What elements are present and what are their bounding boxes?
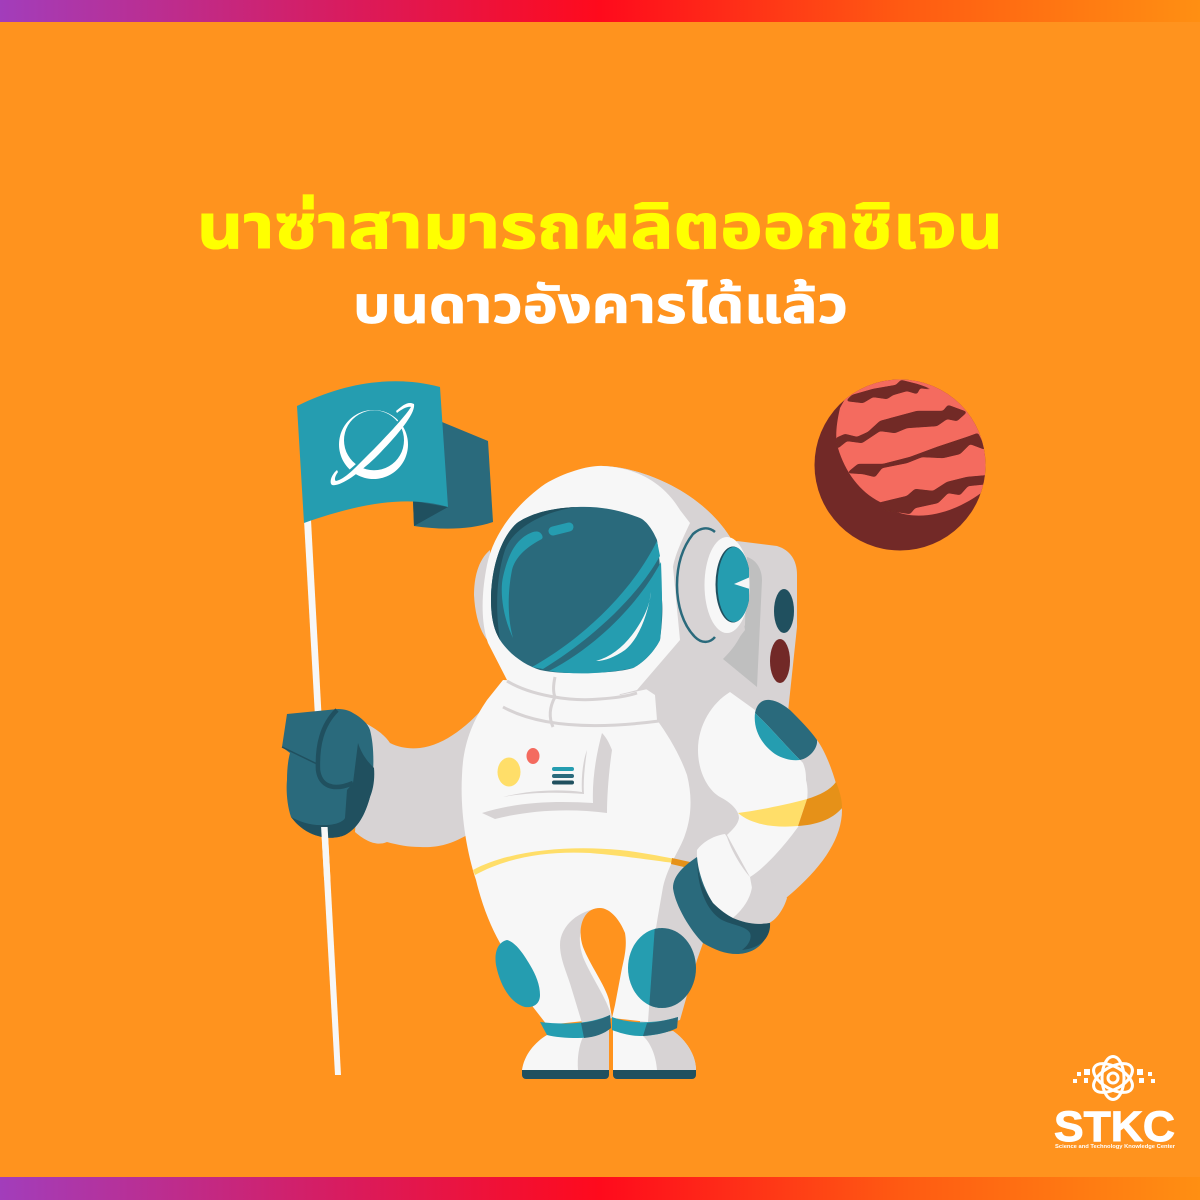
left glove flap line	[282, 747, 317, 764]
waist belt stripe	[473, 848, 675, 875]
backpack	[700, 541, 797, 712]
top gradient bar	[0, 0, 1200, 22]
arm band	[738, 782, 842, 827]
visor teal lower section	[549, 562, 662, 673]
torso and legs	[462, 680, 691, 1025]
ear white ring	[704, 537, 750, 633]
left boot sole	[522, 1070, 609, 1079]
flag planet emblem	[331, 403, 414, 485]
visor rim shadow	[491, 507, 577, 640]
astronaut	[282, 466, 842, 1079]
chest yellow light	[498, 758, 520, 786]
backpack shadow	[723, 557, 762, 687]
right upper arm	[698, 692, 808, 877]
body shadow	[603, 466, 842, 1030]
right glove shadow	[697, 857, 770, 950]
right boot	[613, 1030, 696, 1079]
title line 1: นาซ่าสามารถผลิตออกซิเจน	[197, 193, 1003, 262]
right boot shadow	[643, 1031, 696, 1070]
helmet shadow	[560, 466, 735, 695]
visor reflection	[596, 592, 651, 661]
chest panel	[482, 733, 612, 819]
backpack button dark	[774, 589, 794, 633]
right forearm	[697, 834, 752, 918]
forearm shadow	[733, 880, 787, 924]
right ankle cuff	[612, 1017, 678, 1036]
chest red light	[526, 748, 540, 764]
left boot	[522, 1030, 609, 1079]
left glove shadow	[291, 743, 374, 838]
ear wedge	[734, 578, 749, 589]
STKC logo	[1054, 1056, 1176, 1151]
logo tagline: Science and Technology Knowledge Center	[1055, 1144, 1176, 1150]
waist belt shadow section	[671, 858, 690, 868]
right boot sole	[613, 1070, 696, 1079]
chest pocket thin fold	[503, 750, 587, 797]
right knee pad	[628, 928, 696, 1008]
shoulder patch teal	[755, 713, 800, 760]
right glove	[673, 857, 770, 954]
arm band yellow	[738, 799, 807, 827]
chest status lines	[552, 767, 574, 784]
shoulder patch dark	[755, 700, 817, 760]
title	[197, 193, 1003, 335]
planet mars	[814, 380, 986, 550]
arm band orange	[798, 782, 842, 826]
logo atom icon	[1073, 1056, 1155, 1100]
flag fold shadow	[413, 501, 448, 526]
visor teal stripe	[532, 541, 660, 669]
helmet shell	[483, 466, 690, 697]
emblem orbit	[331, 403, 414, 485]
flag pole	[304, 520, 341, 1075]
pole through glove	[321, 827, 330, 880]
title line 2: บนดาวอังคารได้แล้ว	[353, 277, 848, 335]
left ankle cuff	[540, 1015, 611, 1038]
flag with pole	[297, 381, 493, 1075]
logo wordmark: STKC	[1054, 1103, 1175, 1151]
left glove	[282, 709, 374, 838]
left glove fold	[318, 710, 353, 787]
left boot shadow	[578, 1030, 609, 1070]
planet stripes	[836, 380, 990, 514]
emblem orbit gap	[335, 406, 412, 483]
left arm	[355, 700, 490, 847]
visor highlight long	[502, 531, 543, 638]
helmet	[474, 466, 750, 727]
chest pocket fold	[482, 733, 612, 819]
knee pad teal	[628, 928, 660, 1008]
bottom gradient bar	[0, 1177, 1200, 1200]
planet light surface	[836, 380, 986, 516]
flag back panel	[413, 422, 493, 529]
ear disc	[716, 546, 750, 622]
left ear cap	[474, 550, 492, 645]
visor highlight short	[553, 527, 569, 531]
shoulder patch	[755, 700, 817, 760]
inner leg shadow	[560, 908, 612, 1023]
flag front panel	[297, 381, 448, 523]
leg gap	[581, 908, 626, 1018]
left knee pad	[495, 940, 540, 1007]
ear ring arc	[677, 528, 715, 642]
visor	[491, 507, 662, 673]
backpack button maroon	[770, 639, 790, 683]
emblem crescent	[339, 410, 408, 479]
neck collar	[503, 677, 659, 727]
knee pad dark	[649, 928, 696, 1008]
